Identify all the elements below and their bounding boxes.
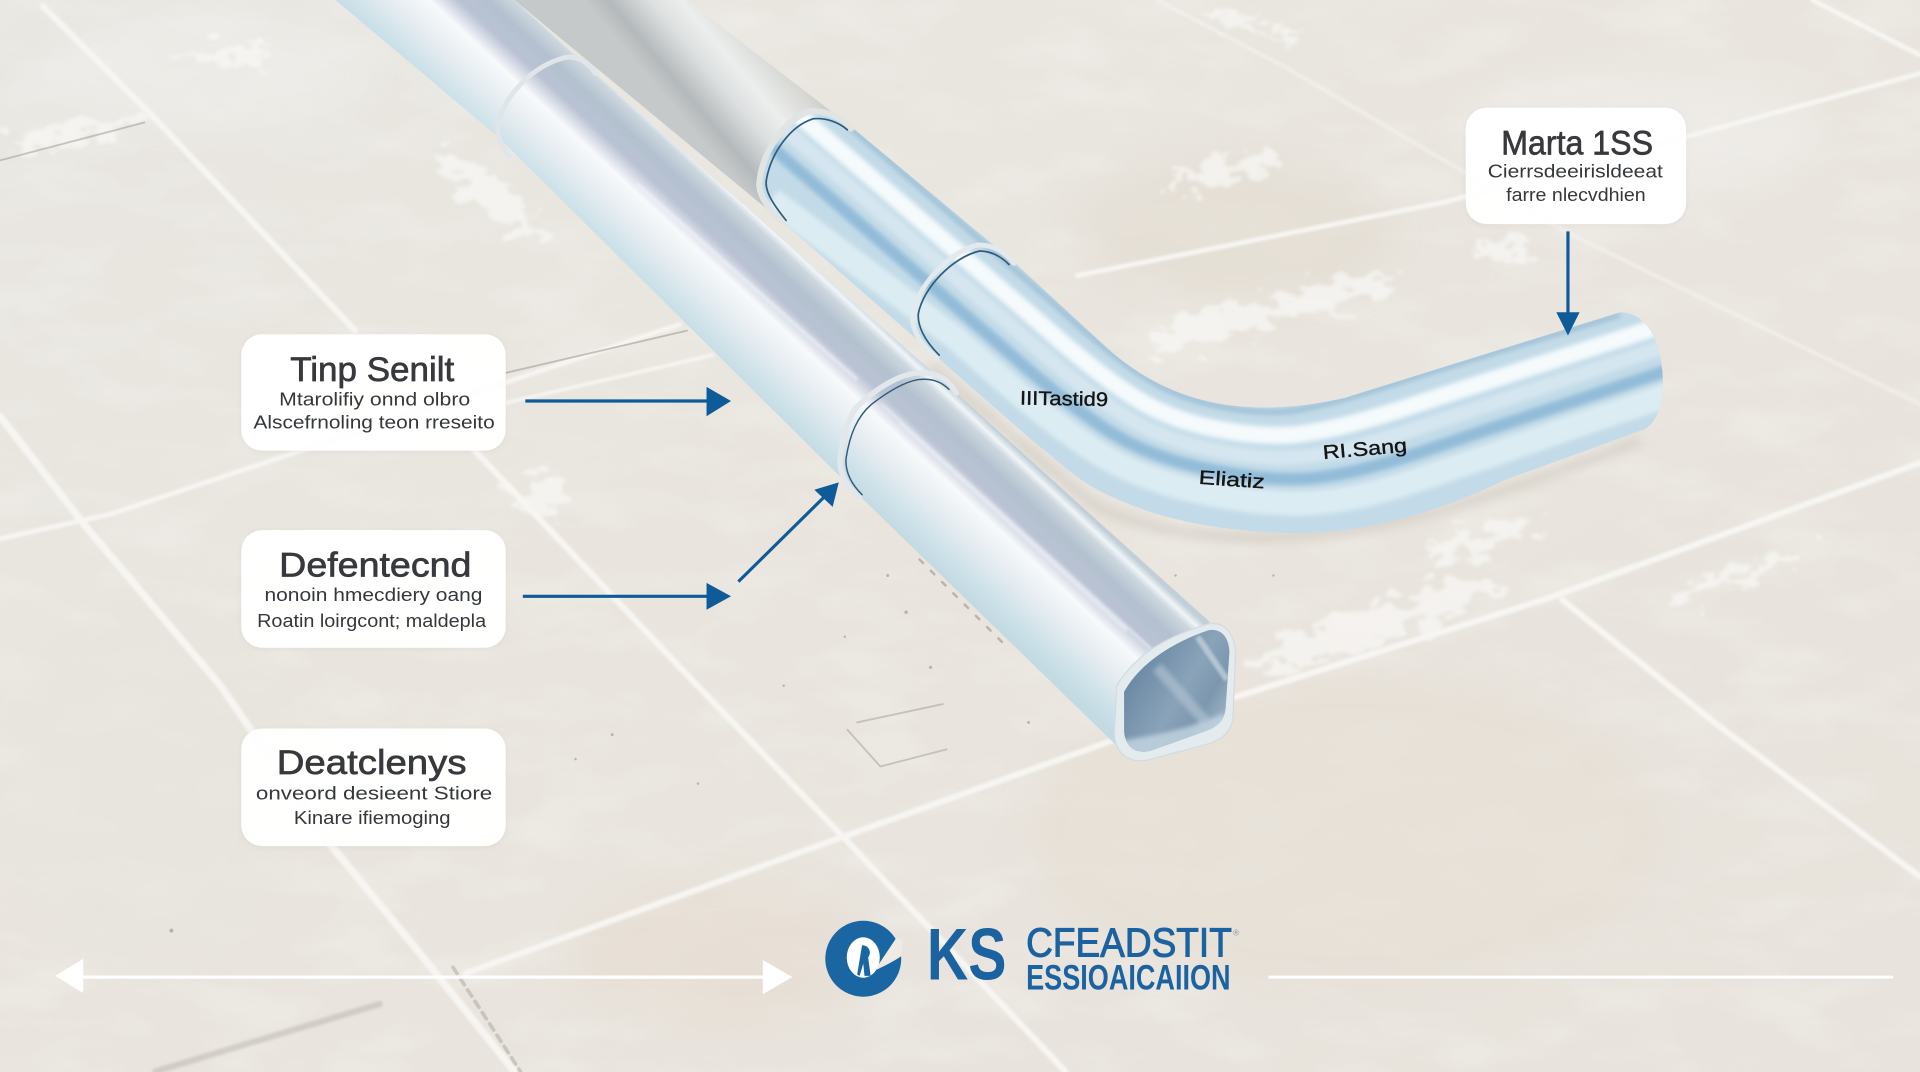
card heading: Deatclenys xyxy=(277,744,467,782)
arrow: diagonal to collar xyxy=(738,482,839,582)
card background xyxy=(241,530,506,648)
arrow: first card to pipe xyxy=(525,387,731,416)
front straight pipe xyxy=(336,0,1236,765)
card description: Kinare ifiemoging xyxy=(294,807,451,828)
ring 1 xyxy=(498,57,595,157)
card description: Alscefrnoling teon rreseito xyxy=(253,412,495,433)
card description: Roatin loirgcont; maldepla xyxy=(257,610,487,631)
brushed highlights on pipe xyxy=(637,184,1151,649)
logo letters KS: KS xyxy=(927,913,1007,996)
white divider line right of logo xyxy=(1269,976,1893,978)
logo line 2: ESSIOAICAIION xyxy=(1026,957,1231,997)
callout card: Defentecnd xyxy=(241,530,506,648)
end opening rim xyxy=(1114,624,1236,761)
card description: Mtarolifiy onnd olbro xyxy=(279,388,470,409)
card description: onveord desieent Stiore xyxy=(256,783,492,804)
callout card: Marta 1SS xyxy=(1466,108,1686,224)
card heading: Marta 1SS xyxy=(1501,124,1653,162)
pipe label: lower bend: Eliatiz xyxy=(1198,467,1265,493)
logo registered mark: ® xyxy=(1233,927,1240,937)
end opening interior xyxy=(1124,630,1229,752)
card heading: Defentecnd xyxy=(279,547,471,585)
bend shading stripes xyxy=(771,113,1714,503)
callout card: Tinp Senilt xyxy=(241,334,506,451)
brand logo xyxy=(825,913,1240,997)
logo mark xyxy=(825,921,902,997)
logo line 1: CFEADSTIT xyxy=(1026,919,1232,965)
soft floor shadow of bend xyxy=(931,367,1641,537)
card background xyxy=(1466,108,1686,224)
arrow: second card to pipe xyxy=(523,583,731,610)
ring A xyxy=(759,111,851,223)
card description xyxy=(256,783,492,828)
blue bent section xyxy=(759,111,1663,533)
arrow: top card down to pipe end xyxy=(1556,231,1580,335)
card background xyxy=(241,334,506,451)
card description: nonoin hmecdiery oang xyxy=(264,584,482,605)
pipe label: upper bend: IIITastid9 xyxy=(1020,388,1108,411)
card description xyxy=(1488,161,1663,205)
back pipe with bend xyxy=(514,0,1714,537)
pipe collar rings xyxy=(498,57,1014,497)
card description: Cierrsdeeirisldeeat xyxy=(1488,161,1663,182)
pipe body xyxy=(336,0,1210,749)
pipe label: right section: RI.Sang xyxy=(1322,435,1408,464)
ring 2 xyxy=(840,373,956,497)
card heading: Tinp Senilt xyxy=(290,351,455,389)
card description: farre nlecvdhien xyxy=(1506,184,1646,205)
card background xyxy=(241,729,506,846)
card description xyxy=(257,584,487,631)
white double-headed arrow xyxy=(55,959,792,994)
callout card: Deatclenys xyxy=(241,729,506,846)
interior reflections xyxy=(1126,634,1228,752)
card description xyxy=(253,388,495,433)
upper silver section xyxy=(514,0,853,223)
ring B xyxy=(912,245,1014,358)
